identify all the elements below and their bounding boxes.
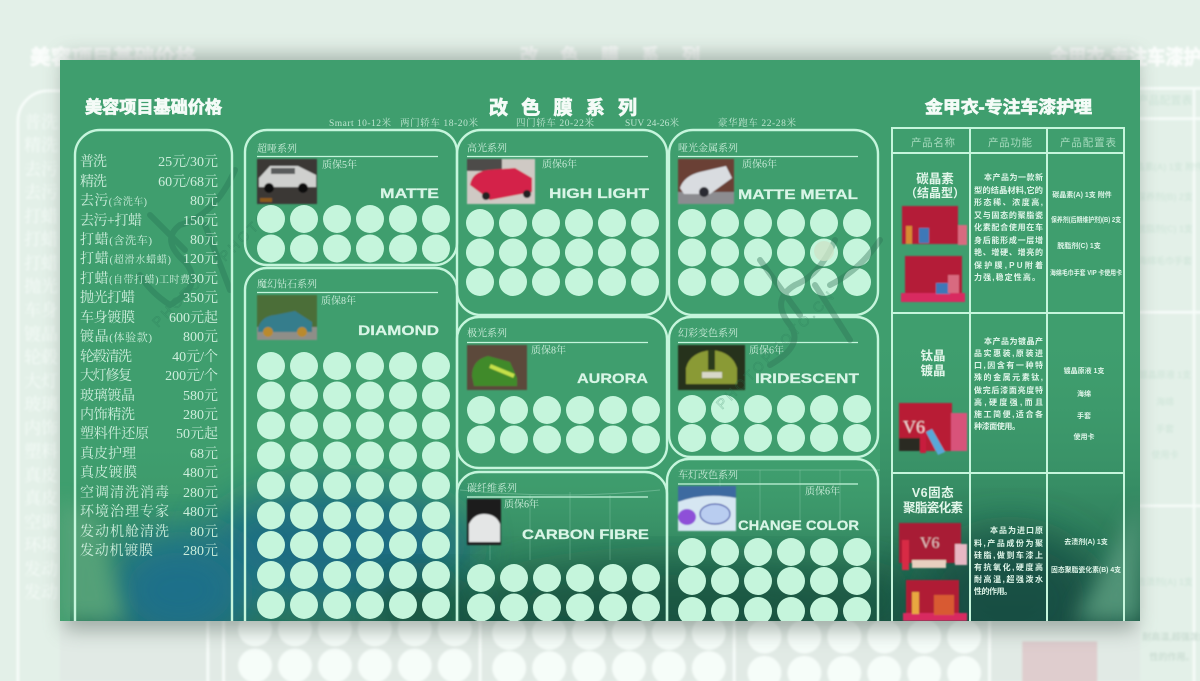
panel: matte series: 质保5年 xyxy=(322,158,357,171)
row 2: titanium crystal: 使用卡 xyxy=(1074,432,1094,441)
ghost text: left list: 精洗 xyxy=(24,136,58,155)
photo: tinted headlights xyxy=(678,486,736,531)
ghost heading: middle: 改色膜系列 xyxy=(520,45,700,66)
panel: matte metal series: 哑光金属系列 xyxy=(678,142,738,154)
heading: Golden armor paint care: 金甲衣-专注车漆护理 xyxy=(925,97,1092,117)
panel: price list: 精洗 xyxy=(80,173,107,190)
row 2: titanium crystal: 钛晶 xyxy=(920,348,946,363)
photo: red sports car xyxy=(467,159,535,204)
panel: aurora series: 极光系列 xyxy=(467,326,507,340)
ghost text: left list: 普洗 xyxy=(24,113,58,132)
panel: iridescent series xyxy=(669,317,878,457)
panel: price list: 去污(含洗车) xyxy=(80,192,147,209)
photo: green aurora car xyxy=(467,345,527,390)
panel: price list: 580元 xyxy=(183,388,218,404)
panel: price list: 打蜡(超滑水蜡蜡) xyxy=(80,250,171,267)
row 3: V6 solid polysiloxane: 有抗氧化,硬度高 xyxy=(974,562,1043,572)
panel: price list: 环境治理专家 xyxy=(80,504,169,520)
panel: price list xyxy=(75,130,232,621)
table header: 产品名称 xyxy=(911,136,956,149)
product image: V6 box: V6 xyxy=(903,417,925,437)
row 1: carbon crystal: 碳晶素(A) 1支 附件 xyxy=(1052,190,1112,199)
ghost text: left list: 发动 xyxy=(24,560,58,579)
ghost text: left list: 空调 xyxy=(24,513,58,532)
panel: matte series: MATTE xyxy=(380,185,439,201)
panel: diamond series: DIAMOND xyxy=(358,322,439,338)
panel: price list: 350元 xyxy=(183,290,218,306)
ghost text: left list: 环境 xyxy=(24,536,58,555)
panel: price list: 25元/30元 xyxy=(158,154,218,170)
panel: price list: 800元 xyxy=(183,329,218,345)
ghost text: left list: 发动 xyxy=(24,583,58,602)
ghost text: left list: 真皮 xyxy=(24,489,58,508)
product table xyxy=(892,128,1124,621)
ghost text: left list: 去污 xyxy=(24,160,58,179)
panel: price list: 280元 xyxy=(183,407,218,423)
panel: matte metal series: MATTE METAL xyxy=(738,186,859,202)
ghost text: left list: 打蜡 xyxy=(24,207,58,226)
car size length legend: 两门轿车 18-20米 xyxy=(400,117,478,129)
panel: carbon fibre series: 碳纤维系列 xyxy=(467,482,517,494)
panel: price list: 30元 xyxy=(190,271,218,287)
ghost text: left list xyxy=(24,113,58,602)
panel: price list: 真皮护理 xyxy=(80,445,136,462)
photo: white SUV xyxy=(257,159,317,204)
row 3: V6 solid polysiloxane: 聚脂瓷化素 xyxy=(903,500,963,515)
ghost text: right table: 手套 xyxy=(1156,423,1174,434)
ghost text: right table: 脱脂剂(C) 1支 xyxy=(1137,223,1193,234)
panel: iridescent series: 质保6年 xyxy=(749,344,784,356)
row 3: V6 solid polysiloxane xyxy=(899,485,1121,621)
panel: price list: 内饰精洗 xyxy=(80,406,135,423)
panel: high light series: 高光系列 xyxy=(467,142,507,154)
row 3: V6 solid polysiloxane: 硅脂,做到车漆上 xyxy=(974,550,1043,560)
panel: matte metal series: 质保6年 xyxy=(742,158,777,170)
panel: aurora series xyxy=(457,317,667,468)
panel: price list: 60元/68元 xyxy=(158,174,218,190)
row 2: titanium crystal: 口,因含有一种特 xyxy=(974,360,1043,370)
panel: aurora series: 质保8年 xyxy=(531,344,566,356)
row 3: V6 solid polysiloxane: 耐高温,超强泼水 xyxy=(974,574,1043,584)
panel: price list: 车身镀膜 xyxy=(80,310,135,326)
row 3: V6 solid polysiloxane: 性的作用。 xyxy=(974,586,1012,596)
row 1: carbon crystal: 又与固态的聚脂瓷 xyxy=(974,210,1043,220)
row 1: carbon crystal: 形态稀、浓度高, xyxy=(974,197,1043,207)
row 1: carbon crystal: 脱脂剂(C) 1支 xyxy=(1057,241,1101,250)
ghost text: left list: 内饰 xyxy=(24,419,58,438)
ghost text: left list: 真皮 xyxy=(24,466,58,485)
watermark: right: PHOTOPHOTO.CN xyxy=(713,286,839,412)
product image: V6 kit xyxy=(899,523,967,570)
row 1: carbon crystal: 身后能形成一层增 xyxy=(974,235,1043,245)
row 2: titanium crystal: 种漆面使用。 xyxy=(974,421,1020,431)
ghost text: right table: 去渍剂(A) 1支 xyxy=(1137,576,1193,587)
product image: V6 kit 2 xyxy=(903,580,967,621)
row 3: V6 solid polysiloxane: 料,产品成份为聚 xyxy=(974,538,1043,548)
panel: price list: 大灯修复 xyxy=(80,367,132,384)
panel: diamond series: 魔幻钻石系列 xyxy=(257,278,317,290)
panel: price list: 打蜡(含洗车) xyxy=(80,231,152,248)
row 2: titanium crystal: 殊的金属元素钛, xyxy=(974,372,1043,382)
row 2: titanium crystal: 镀晶 xyxy=(920,363,946,378)
panel: matte series: 超哑系列 xyxy=(257,142,297,155)
panel: high light series: 质保6年 xyxy=(542,158,577,170)
watermark: left xyxy=(140,170,273,330)
ghost text: left list: 镀晶 xyxy=(24,325,58,344)
ghost text: left list: 打蜡 xyxy=(24,230,58,249)
panel background xyxy=(60,60,1140,621)
row 2: titanium crystal: 本产品为镀晶产 xyxy=(984,336,1043,346)
row 2: titanium crystal: 高,硬度强,而且 xyxy=(974,397,1043,407)
panel: price list: 280元 xyxy=(183,485,218,501)
main panel drop shadow xyxy=(64,56,1136,630)
table header: 产品配置表 xyxy=(1060,136,1116,149)
ghost text: left list: 打蜡 xyxy=(24,254,58,273)
car size length legend: 豪华跑车 22-28米 xyxy=(718,117,796,129)
table header xyxy=(911,137,1116,148)
row 2: titanium crystal: 手套 xyxy=(1077,411,1091,420)
panel: price list: 120元 xyxy=(183,251,218,267)
row 1: carbon crystal: 保养剂(后期维护剂)(B) 2支 xyxy=(1051,215,1121,224)
row 2: titanium crystal: 品实惠装,原装进 xyxy=(974,348,1043,358)
panel: price list: 80元 xyxy=(190,193,218,209)
panel: high light series xyxy=(457,130,667,315)
panel: price list: 80元 xyxy=(190,232,218,248)
row 2: titanium crystal: 做完后漆面亮度特 xyxy=(974,385,1043,395)
table header: 产品功能 xyxy=(988,136,1032,149)
background car photo tint xyxy=(60,320,1140,670)
panel: iridescent series: 幻彩变色系列 xyxy=(678,326,738,340)
panel: price list: 80元 xyxy=(190,524,218,540)
row 3: V6 solid polysiloxane: V6固态 xyxy=(912,485,954,500)
panel: price list: 真皮镀膜 xyxy=(80,464,137,481)
panel: headlight color change series xyxy=(667,459,878,621)
row 3: V6 solid polysiloxane: 去渍剂(A) 1支 xyxy=(1064,537,1108,546)
product image: red box set 2 xyxy=(901,256,965,302)
ghost text: left list: 去污 xyxy=(24,183,58,202)
panel: headlight color change series: CHANGE COLOR xyxy=(738,517,859,533)
row 1: carbon crystal: 化素配合使用在车 xyxy=(974,222,1043,232)
panel: price list: 普洗 xyxy=(80,154,107,170)
row 2: titanium crystal xyxy=(899,336,1104,455)
ghost text: right table: 使用卡 xyxy=(1151,449,1179,460)
row 1: carbon crystal: 碳晶素 xyxy=(916,171,954,186)
panel: price list: 打蜡(自带打蜡)工时费 xyxy=(80,270,191,287)
panel: price list: 发动机镀膜 xyxy=(80,542,153,559)
row 1: carbon crystal: 保护膜,PU附着 xyxy=(974,260,1043,270)
row 2: titanium crystal: 施工简便,适合各 xyxy=(974,409,1043,419)
car size length legend: 四门轿车 20-22米 xyxy=(516,117,594,129)
ghost text: right table: 海绵 xyxy=(1156,396,1174,407)
product image: V6 box xyxy=(899,403,967,455)
panel: matte metal series xyxy=(669,130,878,315)
product image: red box set xyxy=(902,206,967,245)
table grid xyxy=(892,128,1124,621)
car size length legend: Smart 10-12米 xyxy=(329,117,391,129)
watermark: left: PHOTO xyxy=(216,207,273,264)
ghost text: right table: 海绵毛巾手套 xyxy=(1138,255,1192,266)
panel: high light series: HIGH LIGHT xyxy=(549,185,650,201)
panel: price list: 空调清洗消毒 xyxy=(80,484,169,501)
panel: carbon fibre series: 质保6年 xyxy=(504,498,539,510)
row 1: carbon crystal: 力强,稳定性高。 xyxy=(974,272,1040,282)
row 1: carbon crystal: 本产品为一款新 xyxy=(984,172,1043,182)
photo: white car front xyxy=(467,499,501,545)
panel: price list: 200元/个 xyxy=(165,368,218,384)
panel: iridescent series: IRIDESCENT xyxy=(755,370,860,386)
ghost text: right table: 产品配置表 xyxy=(1138,93,1192,107)
panel: diamond series xyxy=(245,268,457,621)
row 2: titanium crystal: 海绵 xyxy=(1077,389,1091,398)
photo: teal sports car xyxy=(257,295,317,340)
row 1: carbon crystal: 海绵毛巾手套 VIP 卡使用卡 xyxy=(1050,268,1122,277)
ghost text: left list: 抛光 xyxy=(24,277,58,296)
ghost text: right table: 镀晶原液 1支 xyxy=(1139,369,1191,380)
ghost text: right table xyxy=(1127,93,1200,662)
photo: iridescent car xyxy=(678,345,745,390)
heading: color change film series: 改色膜系列 xyxy=(489,97,637,119)
ghost text: left list: 玻璃 xyxy=(24,395,58,414)
ghost text: left list: 塑料 xyxy=(24,442,58,461)
row 3: V6 solid polysiloxane: 本品为进口原 xyxy=(990,525,1043,535)
row 1: carbon crystal: 艳、增硬、增亮的 xyxy=(974,247,1043,257)
watermark: right xyxy=(713,240,880,412)
ghost text: left list: 车身 xyxy=(24,301,58,320)
panel: price list: 轮毂清洗 xyxy=(80,348,132,365)
car size length legend: SUV 24-26米 xyxy=(625,117,679,129)
panel: price list: 68元 xyxy=(190,446,218,462)
photo: silver GT car xyxy=(678,159,734,204)
row 1: carbon crystal xyxy=(901,171,1122,302)
panel: headlight color change series: 质保6年 xyxy=(805,484,840,498)
panel: price list: 塑料件还原 xyxy=(80,426,149,442)
panel: price list: 抛光打蜡 xyxy=(80,289,135,306)
panel: price list: 600元起 xyxy=(169,309,218,326)
panel: headlight color change series: 车灯改色系列 xyxy=(678,468,738,482)
heading: beauty service prices: 美容项目基础价格 xyxy=(85,97,222,117)
row 1: carbon crystal: （结晶型） xyxy=(905,185,965,200)
ghost text: left list: 轮毂 xyxy=(24,348,58,367)
panel: price list: 40元/个 xyxy=(172,349,218,365)
panel: price list: 150元 xyxy=(183,213,218,229)
panel: diamond series: 质保8年 xyxy=(321,294,356,307)
watermark: left: PHOTO xyxy=(149,273,206,330)
car size length legend xyxy=(330,118,796,127)
ghost heading: left: 美容项目基础价格 xyxy=(30,45,196,69)
panel: carbon fibre series xyxy=(457,472,667,621)
panel: aurora series: AURORA xyxy=(577,370,648,386)
panel: price list: 280元 xyxy=(183,543,218,559)
panel: price list: 480元 xyxy=(183,465,218,481)
row 1: carbon crystal: 型的结晶材料,它的 xyxy=(974,185,1043,195)
panel: carbon fibre series: CARBON FIBRE xyxy=(522,526,649,542)
product image: V6 kit: V6 xyxy=(920,535,940,552)
row 3: V6 solid polysiloxane: 固态聚脂瓷化素(B) 4支 xyxy=(1051,565,1121,574)
panel: matte series xyxy=(245,130,457,265)
row 2: titanium crystal: 镀晶原液 1支 xyxy=(1064,366,1104,375)
panel: price list: 玻璃镀晶 xyxy=(80,387,135,404)
panel: price list: 镀晶(体验款) xyxy=(80,329,152,345)
ghost text: left list: 大灯 xyxy=(24,372,58,391)
panel: price list: 50元起 xyxy=(176,425,218,442)
ghost text: right table: 性的作用。 xyxy=(1149,651,1195,662)
panel: price list: 480元 xyxy=(183,504,218,520)
panel: price list: 去污+打蜡 xyxy=(80,212,142,229)
ghost text: right table: 保养剂(B) 2支 xyxy=(1137,191,1193,202)
panel: price list: 发动机舱清洗 xyxy=(80,523,169,540)
